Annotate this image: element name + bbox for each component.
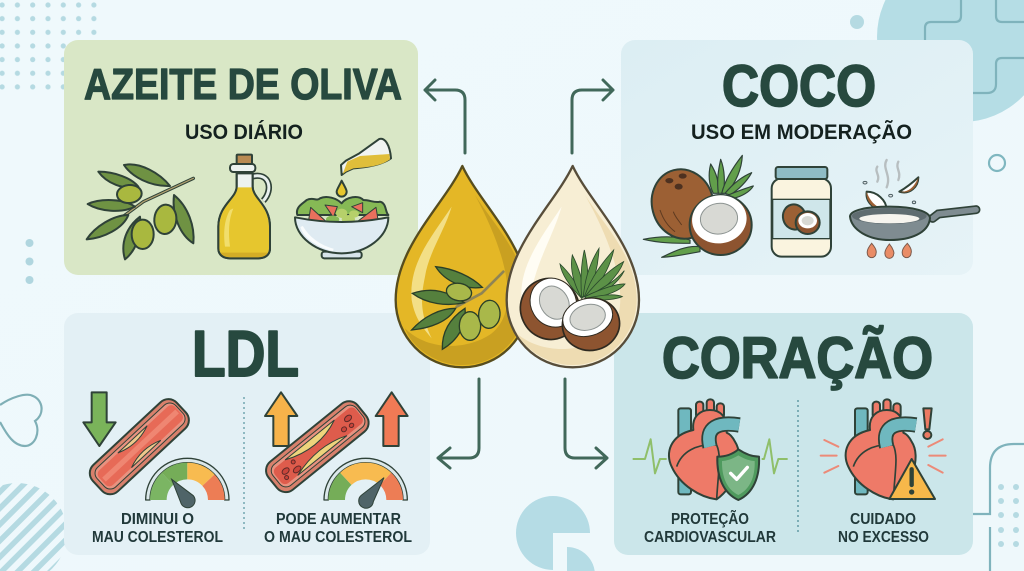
decoration: ring (989, 155, 1005, 171)
icon: heart with warning (821, 399, 946, 499)
icon: frying pan with flames (850, 160, 976, 258)
label: proteção cardiovascular: PROTEÇÃO (671, 510, 749, 528)
icon: coconut oil jar (772, 167, 831, 257)
drop: coconut oil (507, 166, 639, 367)
label: diminui o mau colesterol: DIMINUI O (121, 511, 194, 528)
heading: ldl: LDL (192, 317, 299, 390)
label: cuidado no excesso: CUIDADO (850, 511, 916, 528)
decoration: three dots left (26, 239, 34, 284)
decoration: circle with medical cross top right (877, 0, 1024, 122)
icon: coconuts with leaves (643, 155, 753, 257)
panel: ldl (64, 313, 430, 555)
icon: olive oil bottle (218, 155, 270, 258)
chart: gauge high (324, 458, 407, 508)
arrow: to coração panel (565, 379, 607, 468)
panel: coco (621, 40, 976, 275)
icon: orange up arrow (265, 392, 297, 446)
arrow: to coco panel (572, 80, 613, 153)
subheading: uso diário: USO DIÁRIO (185, 121, 303, 144)
icon: red up arrow (376, 392, 408, 446)
panel: azeite de oliva (64, 40, 418, 275)
decoration: lines and dots bottom right (973, 444, 1024, 571)
drop: olive oil (396, 166, 529, 367)
icon: clean artery (85, 394, 194, 499)
heading: coração: CORAÇÃO (662, 326, 933, 391)
icon: protected heart with shield (633, 399, 788, 500)
decoration: heart outline (0, 395, 42, 446)
decoration: small dot (850, 15, 864, 29)
icon: green down arrow (83, 392, 116, 446)
panel: coração (614, 313, 973, 555)
decoration: striped circle (0, 483, 67, 571)
heading: azeite de oliva: AZEITE DE OLIVA (84, 60, 402, 109)
decoration: pie shapes bottom (516, 496, 595, 571)
label: pode aumentar o mau colesterol: PODE AUMENTAR (276, 511, 401, 528)
label: proteção cardiovascular: CARDIOVASCULAR (644, 529, 776, 546)
icon: salad bowl with oil (295, 139, 391, 258)
heading: coco: COCO (722, 54, 876, 119)
chart: gauge low (146, 458, 229, 508)
icon: clogged artery (261, 397, 373, 497)
label: cuidado no excesso: NO EXCESSO (838, 529, 929, 546)
decoration: dot grid top left (0, 0, 100, 94)
icon: olive branch (87, 164, 194, 259)
arrow: to azeite panel (425, 80, 465, 153)
subheading: uso em moderação: USO EM MODERAÇÃO (691, 121, 912, 144)
divider (797, 400, 799, 534)
arrow: to ldl panel (438, 379, 479, 468)
divider (243, 397, 245, 532)
label: diminui o mau colesterol: MAU COLESTEROL (92, 529, 223, 546)
label: pode aumentar o mau colesterol: O MAU COLESTEROL (264, 529, 412, 546)
